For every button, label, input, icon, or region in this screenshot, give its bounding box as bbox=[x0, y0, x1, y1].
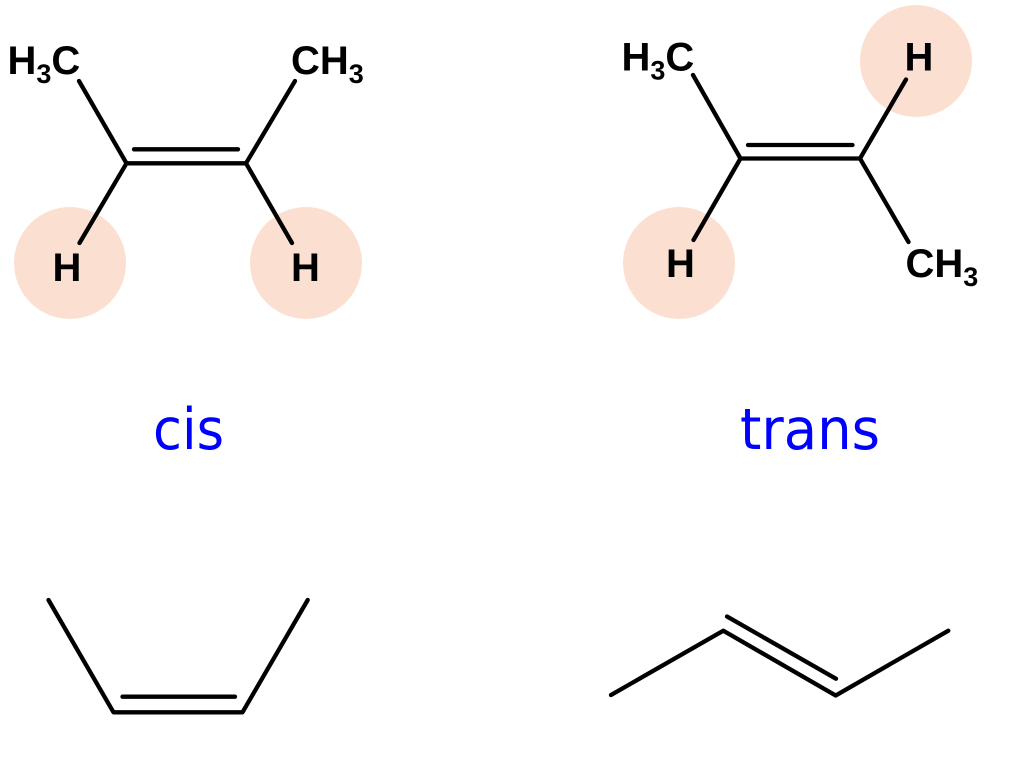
caption: cis: cis bbox=[153, 397, 224, 463]
cis structure with atom labels bbox=[8, 39, 364, 319]
cis bonds bbox=[79, 81, 295, 243]
cis skeletal formula bbox=[48, 600, 308, 712]
trans skeletal formula bbox=[611, 616, 948, 696]
trans bonds bbox=[693, 75, 908, 242]
highlight: left H bbox=[14, 207, 126, 319]
label: CH3: CH bbox=[906, 242, 963, 286]
caption: trans: trans bbox=[740, 397, 880, 463]
label: H3C: H bbox=[8, 39, 36, 83]
label: H3C: 3 bbox=[36, 59, 51, 89]
label: H right: H bbox=[291, 246, 320, 290]
label: H upper: H bbox=[904, 36, 933, 80]
label: H3C: C bbox=[665, 36, 694, 80]
label: CH3: CH bbox=[291, 39, 349, 83]
highlight: right H bbox=[250, 207, 362, 319]
highlight: upper H bbox=[860, 5, 972, 117]
trans structure with atom labels bbox=[622, 5, 978, 319]
label: H left: H bbox=[52, 246, 81, 290]
label: H3C: 3 bbox=[650, 56, 665, 86]
highlight: lower H bbox=[623, 207, 735, 319]
label: H3C: C bbox=[51, 39, 80, 83]
label: CH3: 3 bbox=[963, 262, 978, 292]
label: CH3: 3 bbox=[349, 59, 364, 89]
label: H lower: H bbox=[666, 242, 695, 286]
label: H3C: H bbox=[622, 36, 650, 80]
